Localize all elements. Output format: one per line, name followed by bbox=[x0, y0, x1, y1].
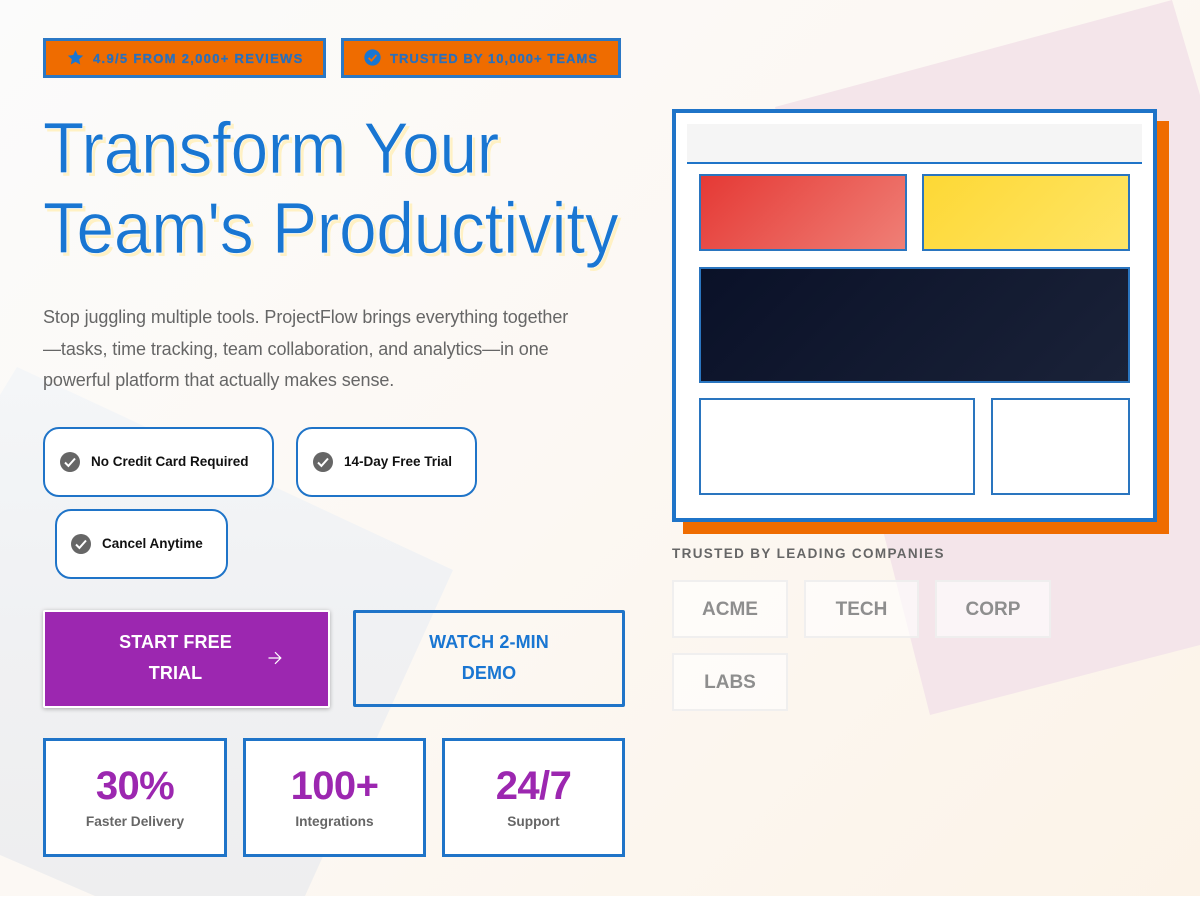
title: Team's Productivity bbox=[43, 189, 618, 269]
description: —tasks, time tracking, team collaboration, and analytics—in one bbox=[43, 338, 549, 358]
chip: cancel anytime: Cancel Anytime bbox=[102, 536, 203, 551]
chip: cancel anytime bbox=[55, 509, 228, 579]
chip: no credit card bbox=[43, 427, 274, 497]
white card small bbox=[991, 398, 1130, 495]
title bbox=[43, 109, 622, 271]
chip: no credit card: No Credit Card Required bbox=[91, 454, 249, 469]
icon: check bbox=[71, 534, 91, 554]
chip: free trial: 14-Day Free Trial bbox=[344, 454, 452, 469]
stat: faster delivery: 30% bbox=[96, 764, 174, 808]
icon: check bbox=[60, 452, 80, 472]
logo: labs: LABS bbox=[704, 672, 756, 693]
badge: reviews bbox=[43, 38, 326, 78]
title: Transform Your bbox=[43, 109, 499, 189]
badge: trusted: TRUSTED BY 10,000+ TEAMS bbox=[390, 51, 598, 66]
button: start free trial bbox=[43, 610, 330, 708]
logo: tech: TECH bbox=[836, 599, 887, 620]
button: start free trial: START FREE bbox=[119, 632, 232, 652]
logo: labs bbox=[672, 653, 788, 711]
description bbox=[43, 307, 568, 390]
mockup shadow bbox=[683, 121, 1169, 534]
icon: star bbox=[68, 50, 84, 64]
dark card bbox=[699, 267, 1130, 383]
mockup header bar bbox=[687, 124, 1142, 164]
logo: acme: ACME bbox=[702, 599, 758, 620]
logo: corp: CORP bbox=[966, 599, 1020, 620]
icon: check bbox=[313, 452, 333, 472]
button: watch demo: DEMO bbox=[462, 663, 516, 683]
logo: acme bbox=[672, 580, 788, 638]
stat: support bbox=[442, 738, 625, 857]
icon: check circle bbox=[364, 49, 381, 66]
stat: support: Support bbox=[507, 814, 560, 829]
button: watch demo bbox=[353, 610, 625, 707]
badge: trusted bbox=[341, 38, 621, 78]
stat: faster delivery bbox=[43, 738, 227, 857]
dashboard mockup bbox=[672, 109, 1169, 534]
description: Stop juggling multiple tools. ProjectFlow brings everything together bbox=[43, 307, 568, 327]
yellow card bbox=[922, 174, 1130, 251]
stat: integrations: Integrations bbox=[295, 814, 374, 829]
icon: arrow bbox=[268, 652, 282, 664]
description: powerful platform that actually makes sense. bbox=[43, 370, 394, 390]
logo: corp bbox=[935, 580, 1051, 638]
logo: tech bbox=[804, 580, 919, 638]
button: watch demo: WATCH 2-MIN bbox=[429, 632, 549, 652]
mockup frame bbox=[672, 109, 1157, 522]
stat: faster delivery: Faster Delivery bbox=[86, 814, 184, 829]
red card bbox=[699, 174, 907, 251]
trusted heading: TRUSTED BY LEADING COMPANIES bbox=[672, 546, 945, 561]
stat: integrations bbox=[243, 738, 426, 857]
button: start free trial: TRIAL bbox=[149, 663, 202, 683]
badge: reviews: 4.9/5 FROM 2,000+ REVIEWS bbox=[93, 51, 304, 66]
stat: integrations: 100+ bbox=[291, 764, 378, 808]
stat: support: 24/7 bbox=[496, 764, 571, 808]
white card wide bbox=[699, 398, 975, 495]
chip: free trial bbox=[296, 427, 477, 497]
